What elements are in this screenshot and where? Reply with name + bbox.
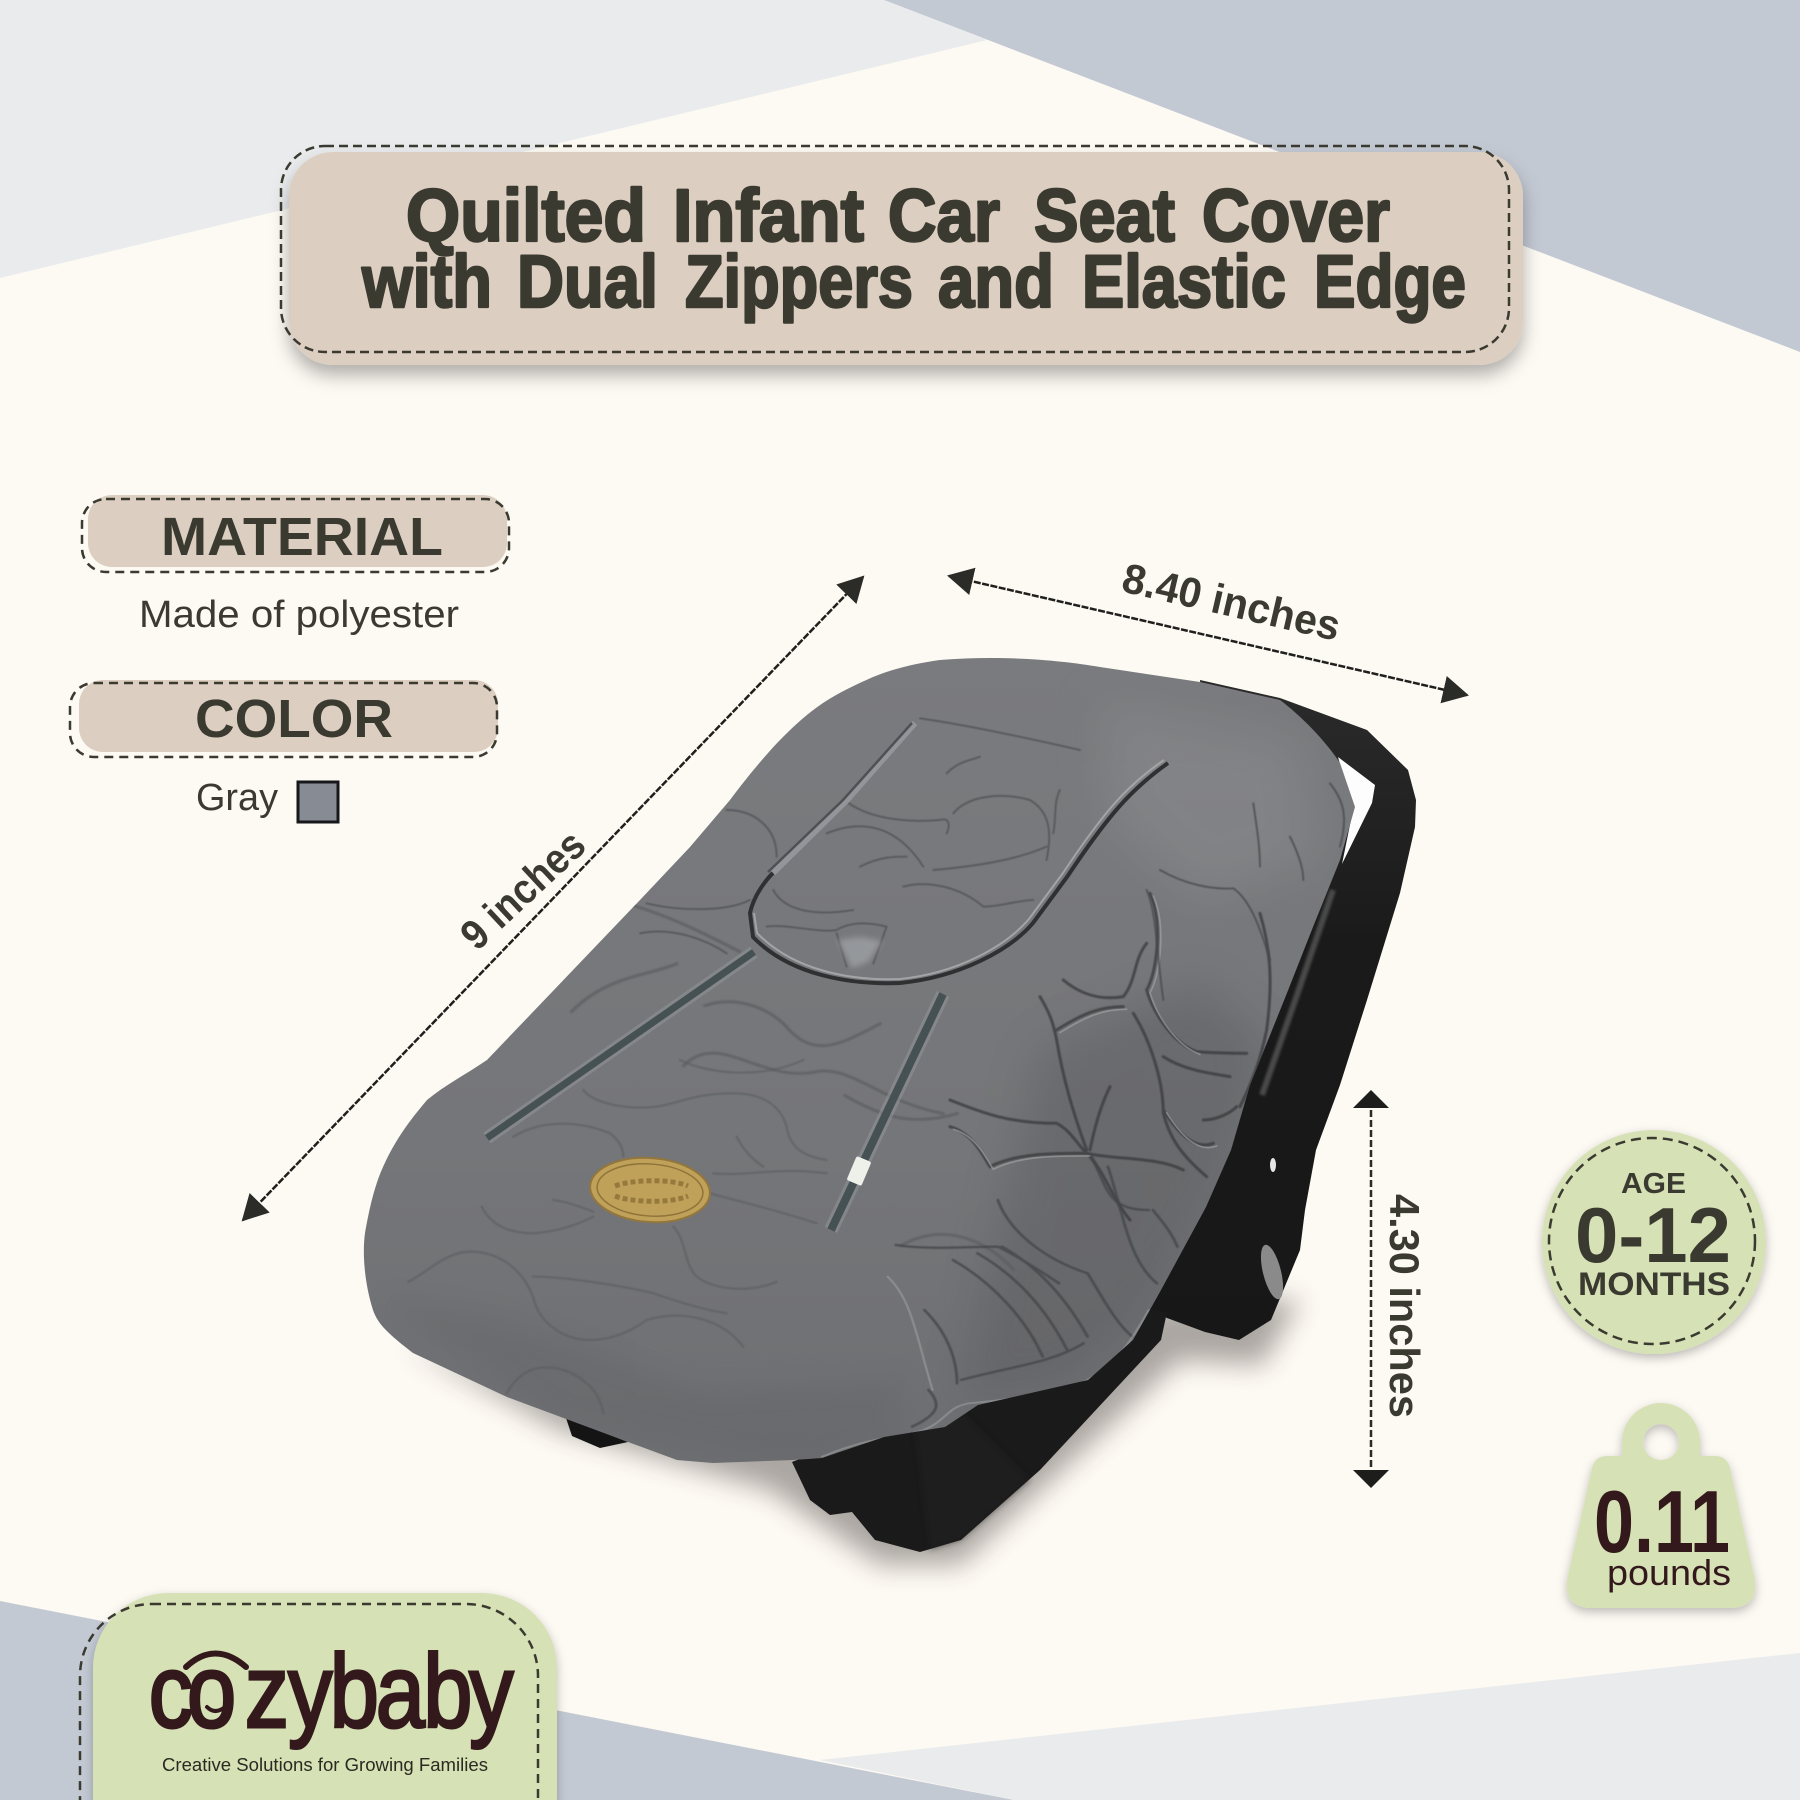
top light (1130, 741, 1287, 870)
dimension: 9 inches: 9 inches (451, 821, 594, 959)
top quilting (640, 718, 1080, 967)
flap right and lower seam (750, 763, 1168, 983)
mid quilting (571, 904, 1013, 1269)
handle window (1338, 757, 1375, 864)
right fold shading (981, 1000, 1255, 1380)
age badge (1542, 1130, 1766, 1354)
seat handle (1130, 680, 1416, 1340)
material label: MATERIAL (161, 507, 443, 567)
color swatch (298, 782, 338, 822)
title text: Zippers (685, 240, 913, 323)
title text: Dual (517, 240, 658, 323)
title text: and (938, 240, 1054, 323)
age badge: MONTHS (1578, 1266, 1730, 1302)
weight badge: pounds (1607, 1552, 1731, 1593)
zipper slider (847, 1156, 871, 1186)
title text: Car (888, 174, 1000, 257)
logo tagline: Creative Solutions for Growing Families (162, 1755, 488, 1775)
flap left double seam (773, 723, 915, 873)
seat shadow (405, 1300, 1300, 1565)
color label: COLOR (195, 689, 393, 749)
lower quilting (408, 1060, 827, 1413)
title text: Quilted (406, 174, 646, 257)
title text (361, 174, 1466, 323)
base facet (915, 1410, 1030, 1550)
dimension: 8.40 inches: 8.40 inches (1118, 554, 1345, 650)
title text: Elastic (1082, 240, 1286, 323)
weight badge: 0.11 (1594, 1472, 1730, 1571)
cover tones and stitching (380, 700, 1344, 1470)
title banner (281, 146, 1523, 365)
front lip shading (380, 1300, 900, 1470)
handle highlight strip (1262, 890, 1333, 1095)
weight badge (1567, 1403, 1755, 1608)
release disk (1256, 1158, 1288, 1301)
logo wordmark: cozybaby (149, 1634, 514, 1750)
dimension: 9 inches (243, 577, 863, 1220)
title text: Cover (1202, 174, 1390, 257)
logo arc and smile (186, 1654, 246, 1711)
seat foot (566, 1418, 628, 1448)
material label (82, 495, 509, 572)
upper right creases (1147, 783, 1344, 1000)
lower right ribs (822, 1157, 1177, 1457)
color text: Gray (196, 777, 278, 819)
logo patch (588, 1154, 712, 1226)
material text: Made of polyester (139, 594, 459, 636)
car seat product image (364, 658, 1416, 1565)
title text: Seat (1034, 174, 1175, 257)
flap snap (838, 937, 882, 968)
seat base (792, 1300, 1167, 1552)
left zipper (487, 952, 754, 1138)
dimension: 4.30 inches (1353, 1090, 1428, 1488)
title text: Edge (1314, 240, 1466, 323)
brand logo panel (80, 1593, 557, 1800)
title text: with (361, 240, 492, 323)
age badge: 0-12 (1575, 1191, 1731, 1279)
quilted cover (364, 658, 1355, 1470)
title text: Infant (673, 174, 864, 257)
right zipper (831, 994, 943, 1230)
age badge: AGE (1621, 1168, 1686, 1200)
right side creases (950, 893, 1270, 1220)
color label (70, 680, 498, 757)
dimension: 4.30 inches: 4.30 inches (1381, 1194, 1428, 1418)
dimension: 8.40 inches (949, 554, 1467, 695)
